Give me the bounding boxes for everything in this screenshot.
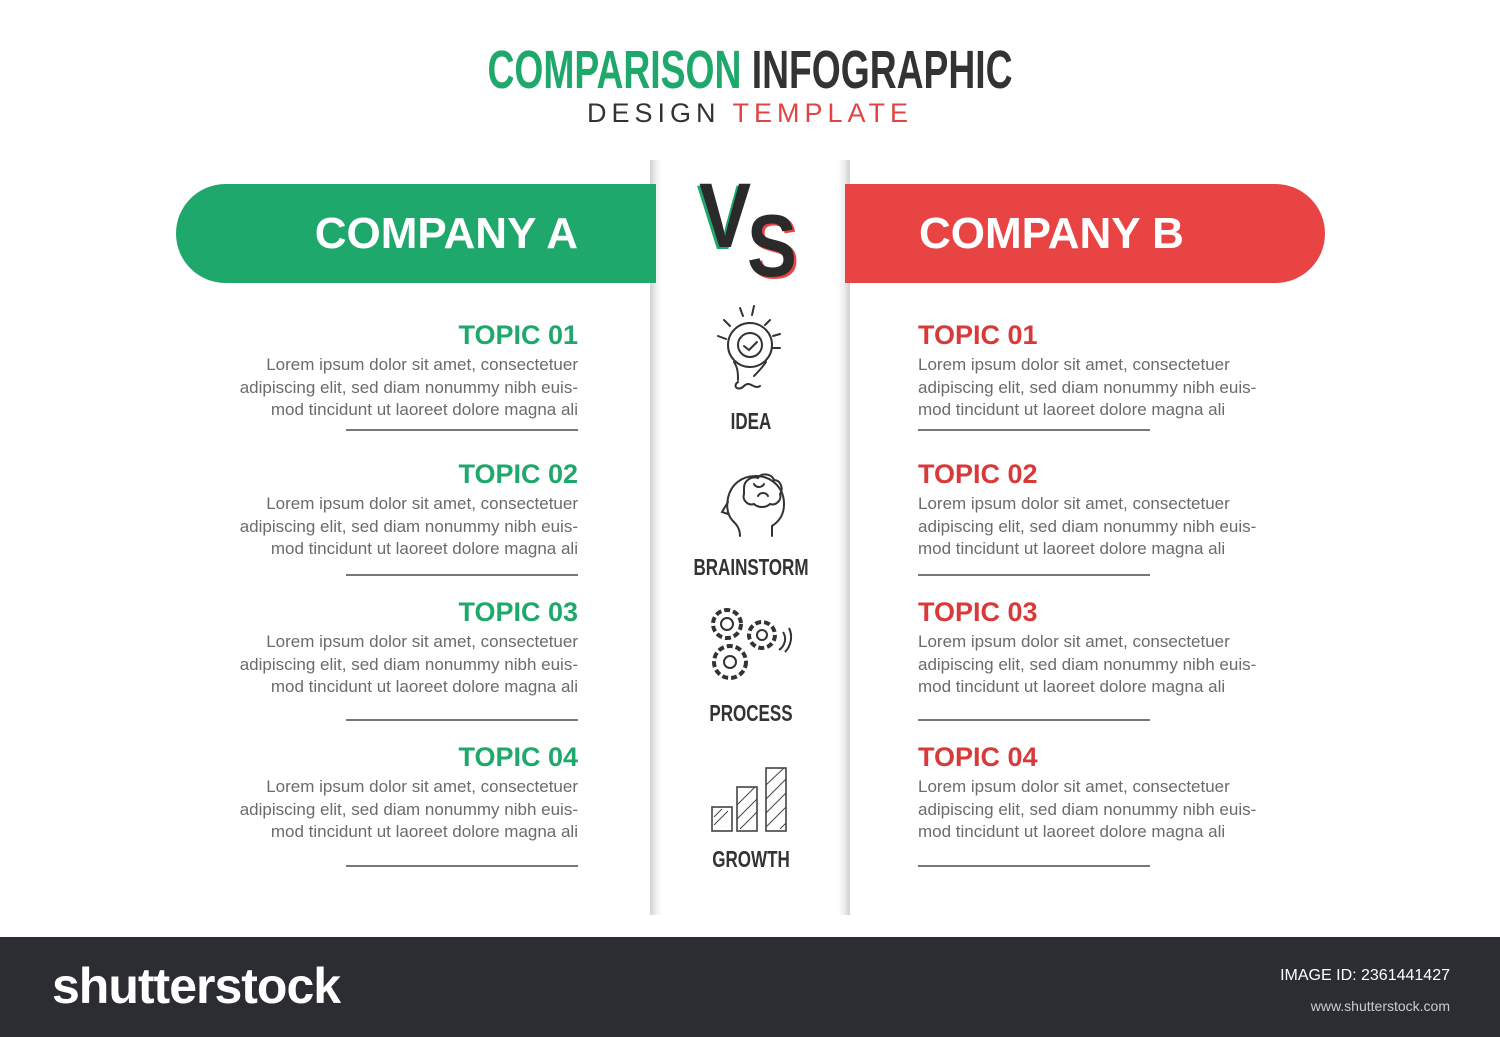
topic B3: mod tincidunt ut laoreet dolore magna ali [918, 677, 1225, 696]
topic A1: adipiscing elit, sed diam nonummy nibh euis- [240, 378, 578, 396]
header: company A [176, 184, 656, 283]
topic A4: TOPIC 04 [458, 742, 578, 772]
topic B1: mod tincidunt ut laoreet dolore magna ali [918, 400, 1225, 419]
VS: V [699, 165, 751, 267]
topic B4 [918, 742, 1256, 841]
label: idea: IDEA [731, 408, 771, 434]
label: growth: GROWTH [712, 846, 790, 872]
topic B1 [918, 320, 1256, 419]
subtitle: DESIGN TEMPLATE [587, 98, 913, 128]
icon: growth bars [711, 767, 787, 832]
icon: idea bulb [717, 305, 781, 390]
topic B1: TOPIC 01 [918, 320, 1038, 350]
topic B2: TOPIC 02 [918, 459, 1038, 489]
title: COMPARISON INFOGRAPHIC [487, 40, 1013, 100]
topic B3: adipiscing elit, sed diam nonummy nibh euis- [918, 654, 1256, 674]
VS: S [747, 196, 797, 295]
header: company B: COMPANY B [919, 209, 1184, 258]
header: company A: COMPANY A [315, 209, 578, 258]
panel: company B topics [918, 320, 1256, 867]
topic B3 [918, 597, 1256, 696]
center column [650, 160, 850, 915]
topic B3: Lorem ipsum dolor sit amet, consectetuer [918, 632, 1230, 651]
footer logo: shutterstock [52, 958, 340, 1014]
panel: company A topics [240, 320, 578, 867]
footer image id: www.shutterstock.com [1311, 998, 1450, 1014]
label: process: PROCESS [709, 700, 793, 726]
topic A3 [240, 597, 578, 696]
label: brainstorm: BRAINSTORM [693, 554, 809, 580]
topic A4: adipiscing elit, sed diam nonummy nibh euis- [240, 800, 578, 818]
topic A1 [240, 320, 578, 419]
topic B2: Lorem ipsum dolor sit amet, consectetuer [918, 494, 1230, 513]
topic B4: mod tincidunt ut laoreet dolore magna ali [918, 822, 1225, 841]
topic A3: mod tincidunt ut laoreet dolore magna ali [271, 677, 578, 696]
topic A2: adipiscing elit, sed diam nonummy nibh euis- [240, 516, 578, 536]
topic B4: Lorem ipsum dolor sit amet, consectetuer [918, 777, 1230, 796]
topic A1: Lorem ipsum dolor sit amet, consectetuer [266, 355, 578, 374]
topic A2: Lorem ipsum dolor sit amet, consectetuer [266, 494, 578, 513]
topic A3: adipiscing elit, sed diam nonummy nibh euis- [240, 654, 578, 674]
topic B2: adipiscing elit, sed diam nonummy nibh euis- [918, 516, 1256, 536]
VS [697, 165, 797, 295]
topic A4: mod tincidunt ut laoreet dolore magna ali [271, 822, 578, 841]
icon: brainstorm head [720, 473, 785, 537]
footer bar [0, 937, 1500, 1037]
icon: process gears [711, 608, 792, 680]
topic B3: TOPIC 03 [918, 597, 1038, 627]
topic B1: Lorem ipsum dolor sit amet, consectetuer [918, 355, 1230, 374]
topic B2: mod tincidunt ut laoreet dolore magna ali [918, 539, 1225, 558]
topic A4: Lorem ipsum dolor sit amet, consectetuer [266, 777, 578, 796]
topic A2: TOPIC 02 [458, 459, 578, 489]
topic B4: adipiscing elit, sed diam nonummy nibh euis- [918, 800, 1256, 818]
topic A1: mod tincidunt ut laoreet dolore magna ali [271, 400, 578, 419]
footer image id [1280, 967, 1450, 1014]
topic B4: TOPIC 04 [918, 742, 1038, 772]
topic A3: Lorem ipsum dolor sit amet, consectetuer [266, 632, 578, 651]
topic A2 [240, 459, 578, 558]
header: company B [845, 184, 1325, 283]
topic A4 [240, 742, 578, 841]
topic B1: adipiscing elit, sed diam nonummy nibh euis- [918, 378, 1256, 396]
footer image id: IMAGE ID: 2361441427 [1280, 967, 1450, 984]
topic B2 [918, 459, 1256, 558]
topic A2: mod tincidunt ut laoreet dolore magna ali [271, 539, 578, 558]
topic A3: TOPIC 03 [458, 597, 578, 627]
topic A1: TOPIC 01 [458, 320, 578, 350]
